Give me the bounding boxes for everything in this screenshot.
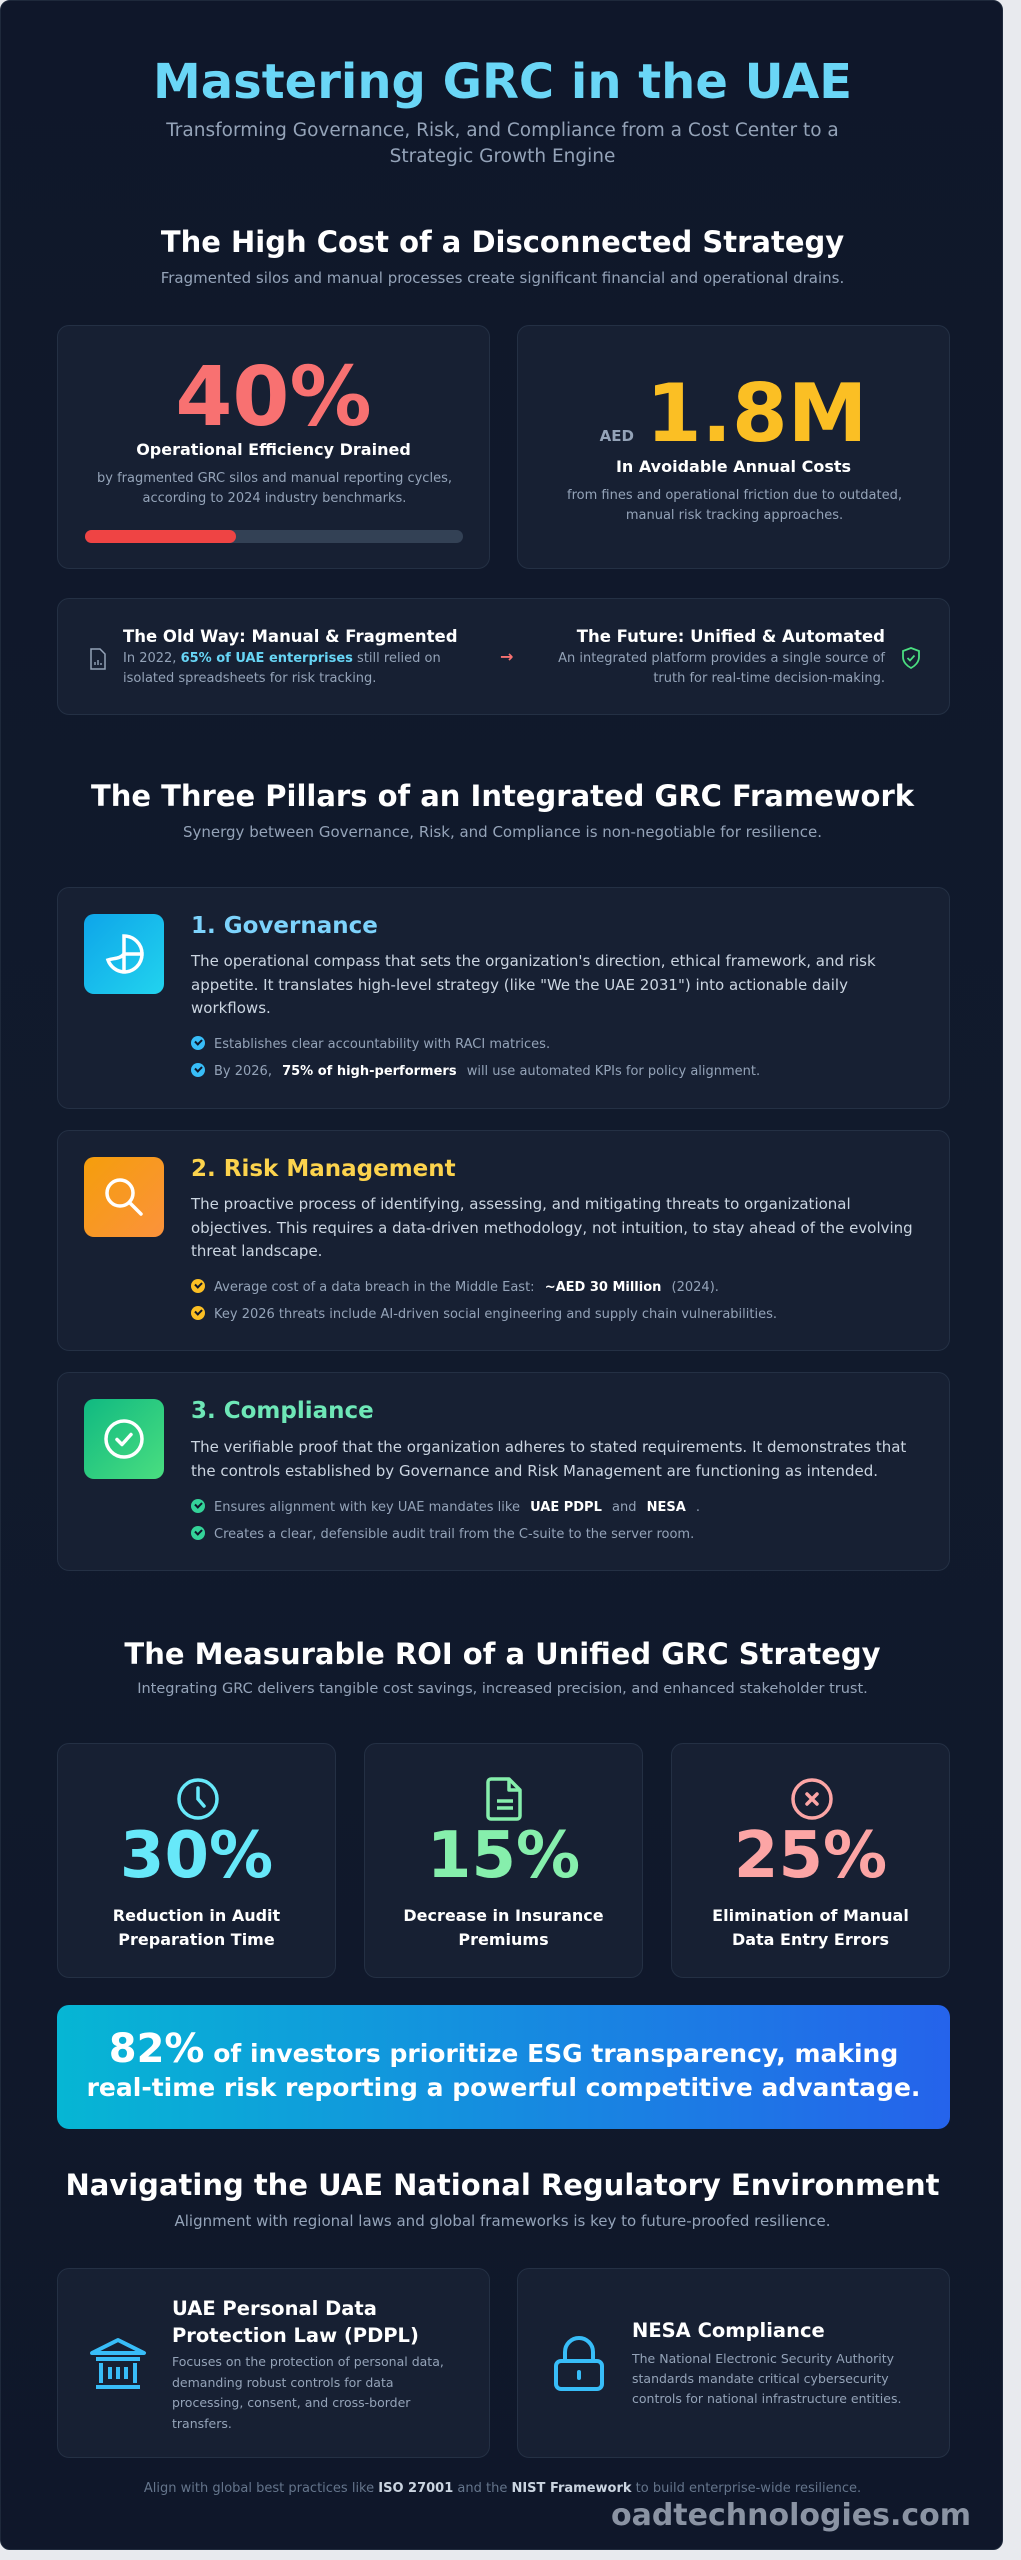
icon: risk xyxy=(84,1157,164,1237)
panel: old way vs future xyxy=(57,598,950,715)
stat: 40%: 40% xyxy=(175,350,372,445)
heading: pillars: The Three Pillars of an Integrated GRC Framework xyxy=(91,779,914,813)
title: UAE Personal Data xyxy=(172,2297,377,2320)
title xyxy=(172,2297,419,2347)
panel: 1.8M costs xyxy=(517,325,950,569)
bullets: compliance xyxy=(191,1499,700,1542)
label: In Avoidable Annual Costs xyxy=(616,457,851,476)
label xyxy=(403,1906,604,1949)
pillar title: compliance: 3. Compliance xyxy=(191,1398,374,1424)
icon: clock xyxy=(177,1778,219,1820)
panel: ROI 15% xyxy=(364,1743,643,1978)
label: Reduction in Audit xyxy=(113,1906,280,1925)
panel: ROI 30% xyxy=(57,1743,336,1978)
bullets: governance xyxy=(191,1036,760,1079)
description: by fragmented GRC silos and manual reporting cycles, according to 2024 industry benchmarks. xyxy=(97,471,452,506)
stat: 30% xyxy=(120,1819,273,1893)
panel: compliance xyxy=(57,1372,950,1571)
title: Protection Law (PDPL) xyxy=(172,2324,419,2347)
subheading: regulatory: Alignment with regional laws and global frameworks is key to future-proofed resilience. xyxy=(174,2212,830,2230)
bullets: risk xyxy=(191,1279,777,1322)
footer note: Align with global best practices like ISO 27001 and the NIST Framework to build enterprise-wide resilience. xyxy=(144,2481,861,2496)
text: future xyxy=(558,627,886,686)
panel: risk management xyxy=(57,1130,950,1351)
pillar text: risk: The proactive process of identifying, assessing, and mitigating threats to organizational objectives. This requires a data-driven methodology, not intuition, to stay ahead of the evolving threat landscape. xyxy=(191,1195,913,1260)
bullets: compliance: Ensures alignment with key UAE mandates like UAE PDPL and NESA . xyxy=(214,1500,700,1515)
icon: governance xyxy=(84,914,164,994)
label: Operational Efficiency Drained xyxy=(136,440,411,459)
bullets: governance: By 2026, 75% of high-performers will use automated KPIs for policy alignment. xyxy=(214,1064,760,1079)
pillar text: governance: The operational compass that sets the organization's direction, ethical framework, and risk appetite. It translates high-level strategy (like "We the UAE 2031") into actionable daily workflows. xyxy=(191,952,876,1017)
subheading: ROI: Integrating GRC delivers tangible cost savings, increased precision, and enhanced stakeholder trust. xyxy=(137,1681,868,1697)
pillar title: risk: 2. Risk Management xyxy=(191,1156,456,1182)
icon: x circle xyxy=(791,1778,833,1820)
callout: investors banner: 82% of investors prioritize ESG transparency, making xyxy=(109,2026,898,2072)
bullets: compliance: Creates a clear, defensible audit trail from the C-suite to the server room. xyxy=(214,1527,694,1542)
icon: compliance xyxy=(84,1399,164,1479)
label xyxy=(712,1906,909,1949)
brand watermark: oadtechnologies.com xyxy=(611,2498,971,2533)
stat: AED 1.8M: AED1.8M xyxy=(600,367,867,460)
text: future: An integrated platform provides a single source of truth for real-time decision-making. xyxy=(558,651,885,686)
label: Elimination of Manual xyxy=(712,1906,909,1925)
icon: document xyxy=(90,648,106,670)
bullets: risk: Average cost of a data breach in the Middle East: ~AED 30 Million (2024). xyxy=(214,1280,719,1295)
text: old way: In 2022, 65% of UAE enterprises still relied on isolated spreadsheets for risk tracking. xyxy=(123,651,441,686)
description: from fines and operational friction due to outdated, manual risk tracking approaches. xyxy=(567,488,902,523)
callout: investors banner: real-time risk reporting a powerful competitive advantage. xyxy=(87,2073,920,2102)
text: old way xyxy=(123,627,458,686)
panel: governance xyxy=(57,887,950,1109)
icon: bank xyxy=(90,2338,146,2389)
panel: PDPL xyxy=(57,2268,490,2458)
title: NESA Compliance xyxy=(632,2319,825,2342)
bullets: governance: Establishes clear accountability with RACI matrices. xyxy=(214,1037,550,1052)
subtitle: Transforming Governance, Risk, and Compliance from a Cost Center to a Strategic Growth Engine xyxy=(166,120,839,167)
label: Data Entry Errors xyxy=(732,1930,889,1949)
description: The National Electronic Security Authority standards mandate critical cybersecurity controls for national infrastructure entities. xyxy=(632,2351,901,2406)
pillar title: governance: 1. Governance xyxy=(191,913,378,939)
panel: NESA xyxy=(517,2268,950,2458)
heading: regulatory: Navigating the UAE National Regulatory Environment xyxy=(66,2168,939,2202)
stat: 25% xyxy=(734,1819,887,1893)
bullets: risk: Key 2026 threats include AI-driven social engineering and supply chain vulnerabilities. xyxy=(214,1307,777,1322)
text: old way: The Old Way: Manual & Fragmented xyxy=(123,627,458,646)
label: Preparation Time xyxy=(118,1930,275,1949)
title: Mastering GRC in the UAE xyxy=(153,54,852,110)
label: Decrease in Insurance xyxy=(403,1906,604,1925)
label: Premiums xyxy=(458,1930,549,1949)
panel: 40% efficiency xyxy=(57,325,490,569)
icon: document xyxy=(486,1777,522,1821)
heading: ROI: The Measurable ROI of a Unified GRC Strategy xyxy=(124,1637,881,1671)
arrow: → xyxy=(500,647,513,666)
icon: shield xyxy=(902,647,920,669)
progress bar xyxy=(85,530,463,543)
text: future: The Future: Unified & Automated xyxy=(577,627,885,646)
subheading: pillars: Synergy between Governance, Risk, and Compliance is non-negotiable for resilience. xyxy=(183,823,822,841)
description: Focuses on the protection of personal data, demanding robust controls for data processing, consent, and cross-border transfers. xyxy=(172,2354,444,2430)
heading: high cost: The High Cost of a Disconnected Strategy xyxy=(161,225,844,259)
panel: ROI 25% xyxy=(671,1743,950,1978)
callout: investors banner xyxy=(57,2005,950,2129)
label xyxy=(113,1906,280,1949)
pillar text: compliance: The verifiable proof that the organization adheres to stated requirements. It demonstrates that the controls established by Governance and Risk Management are functioning as intended. xyxy=(191,1438,906,1480)
icon: lock xyxy=(554,2336,604,2391)
subheading: high cost: Fragmented silos and manual processes create significant financial and operational drains. xyxy=(161,269,844,287)
stat: 15% xyxy=(427,1819,580,1893)
